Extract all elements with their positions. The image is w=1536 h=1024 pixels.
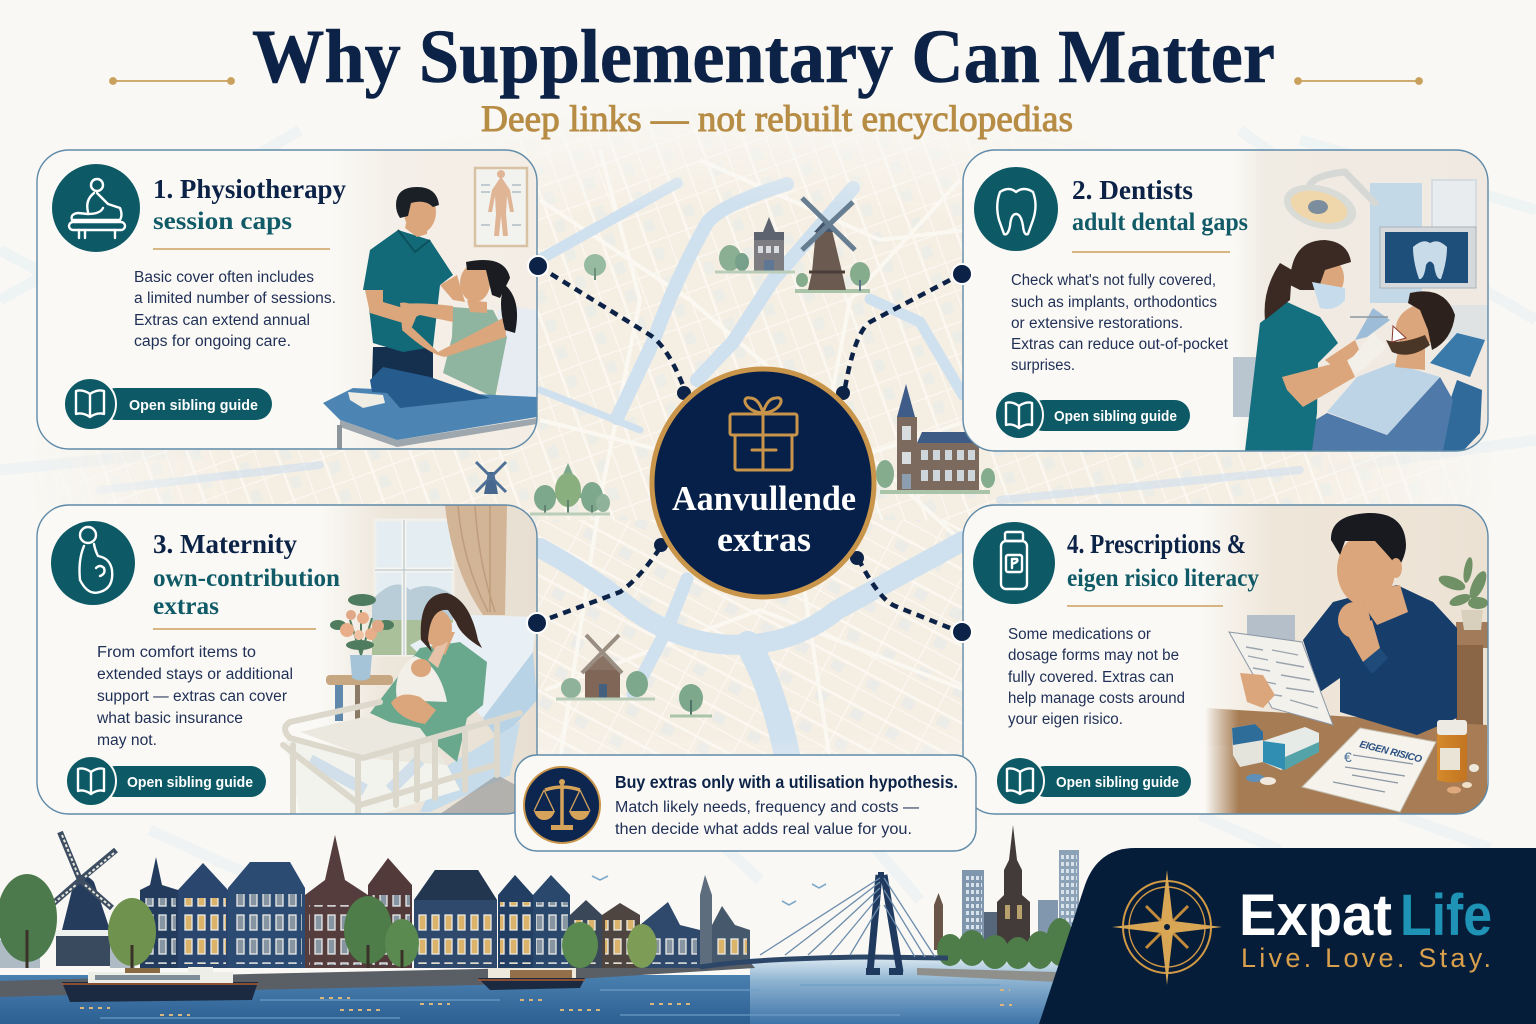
windmill (48, 832, 116, 966)
body text: a limited number of sessions. (134, 290, 336, 307)
body text: surprises. (1011, 357, 1075, 374)
icon: tooth (974, 167, 1058, 251)
button: Open sibling guide (1054, 408, 1177, 425)
tagline: Live. Love. Stay. (1241, 943, 1491, 973)
body text: From comfort items to (97, 644, 256, 661)
button (64, 378, 272, 430)
card border (963, 505, 1488, 814)
hub label: Aanvullende (672, 479, 856, 518)
right skyline towers (917, 825, 1079, 982)
landmark: small far windmill (476, 462, 506, 494)
button (995, 391, 1190, 439)
landmark: big church (876, 384, 995, 492)
card border (963, 150, 1488, 451)
body text (1011, 272, 1229, 374)
canal houses (140, 835, 750, 968)
panel: 4 prescriptions (963, 505, 1490, 814)
body text (96, 644, 293, 749)
button (66, 756, 266, 806)
heading: 2. Dentists (1072, 175, 1193, 205)
body text: dosage forms may not be (1008, 647, 1179, 664)
far blue silhouettes (0, 920, 135, 968)
body text: Extras can extend annual (134, 312, 310, 329)
body text: extended stays or additional (97, 666, 293, 683)
heading: 4. Prescriptions & (1067, 529, 1246, 559)
illustration: physiotherapist and patient (323, 150, 537, 449)
callout line 2: then decide what adds real value for you. (615, 821, 912, 838)
hub circle: Aanvullende extras: extras (717, 520, 811, 559)
landmark: small church (715, 217, 795, 272)
panel: 3 maternity (37, 505, 537, 814)
body text (1008, 626, 1185, 728)
icon: pregnancy (51, 521, 135, 605)
callout heading: Buy extras only with a utilisation hypothesis. (615, 772, 958, 792)
button: Open sibling guide (127, 774, 253, 791)
quay wall (0, 962, 755, 997)
body text: your eigen risico. (1008, 711, 1123, 728)
card border (37, 505, 537, 814)
body text: Some medications or (1008, 626, 1151, 643)
subheading: adult dental gaps (1072, 209, 1248, 236)
body text: such as implants, orthodontics (1011, 294, 1217, 311)
brand name: Expat (1239, 883, 1392, 948)
subtitle: Deep links — not rebuilt encyclopedias (481, 99, 1073, 140)
icon: gift (730, 398, 797, 470)
subheading: own-contribution (153, 565, 340, 592)
icon: compass (1112, 870, 1222, 985)
boat 1 (62, 967, 258, 1002)
body text (134, 269, 336, 350)
illustration: dentist and patient (1233, 150, 1488, 451)
landmark: tree lower (670, 684, 712, 716)
subheading: session caps (153, 208, 292, 235)
body text: Check what's not fully covered, (1011, 272, 1216, 289)
skyline: waterfront (0, 832, 1070, 1024)
bridge (700, 872, 948, 975)
body text: or extensive restorations. (1011, 315, 1183, 332)
heading: 1. Physiotherapy (153, 174, 346, 204)
illustration: man reading eigen risico document (1200, 505, 1490, 814)
body text: support — extras can cover (97, 688, 287, 705)
illustration: man reading eigen risico document: € (1344, 749, 1352, 765)
illustration: mother and newborn (283, 505, 537, 814)
callout: utilisation hypothesis (515, 755, 976, 851)
faint outer map lines (0, 130, 1536, 900)
body text: caps for ongoing care. (134, 333, 291, 350)
body text: Extras can reduce out-of-pocket (1011, 336, 1229, 353)
panel: 2 dentists (963, 150, 1488, 451)
card border (37, 150, 537, 449)
title ornaments (110, 78, 1422, 84)
right tree row (937, 918, 1074, 969)
body text: help manage costs around (1008, 690, 1185, 707)
birds (592, 876, 826, 905)
connector: card 4 (850, 551, 972, 642)
icon: medicine bottle (973, 522, 1055, 604)
icon: scales (524, 767, 600, 843)
brand panel: ExpatLife logo (1039, 848, 1536, 1024)
connector: card 3 (527, 538, 668, 633)
water (0, 958, 1070, 1024)
subheading line 2: extras (153, 593, 219, 620)
connector: card 2 (836, 264, 972, 400)
button (996, 757, 1191, 805)
boat 2 (478, 968, 585, 990)
button: Open sibling guide (129, 397, 258, 414)
brand name accent: Life (1400, 883, 1492, 948)
central city map (96, 150, 1399, 756)
landmark: tree group (530, 463, 610, 514)
landmark: tree top left (584, 254, 606, 280)
button: Open sibling guide (1056, 774, 1179, 791)
body text: what basic insurance (96, 710, 243, 727)
landmark: windmill top (795, 198, 870, 291)
hub circle: Aanvullende extras (652, 369, 874, 597)
callout line 1: Match likely needs, frequency and costs — (615, 799, 920, 816)
icon: massage (52, 164, 140, 252)
body text: fully covered. Extras can (1008, 669, 1174, 686)
title: Why Supplementary Can Matter (252, 15, 1275, 99)
heading: 3. Maternity (153, 529, 297, 559)
document label: EIGEN RISICO (1358, 739, 1423, 765)
trees (0, 874, 657, 968)
panel: 1 physiotherapy (37, 150, 537, 449)
body text: Basic cover often includes (134, 269, 314, 286)
connector: card 1 (528, 256, 691, 400)
landmark: windmill lower (556, 635, 655, 699)
subheading: eigen risico literacy (1067, 565, 1259, 592)
body text: may not. (97, 732, 157, 749)
